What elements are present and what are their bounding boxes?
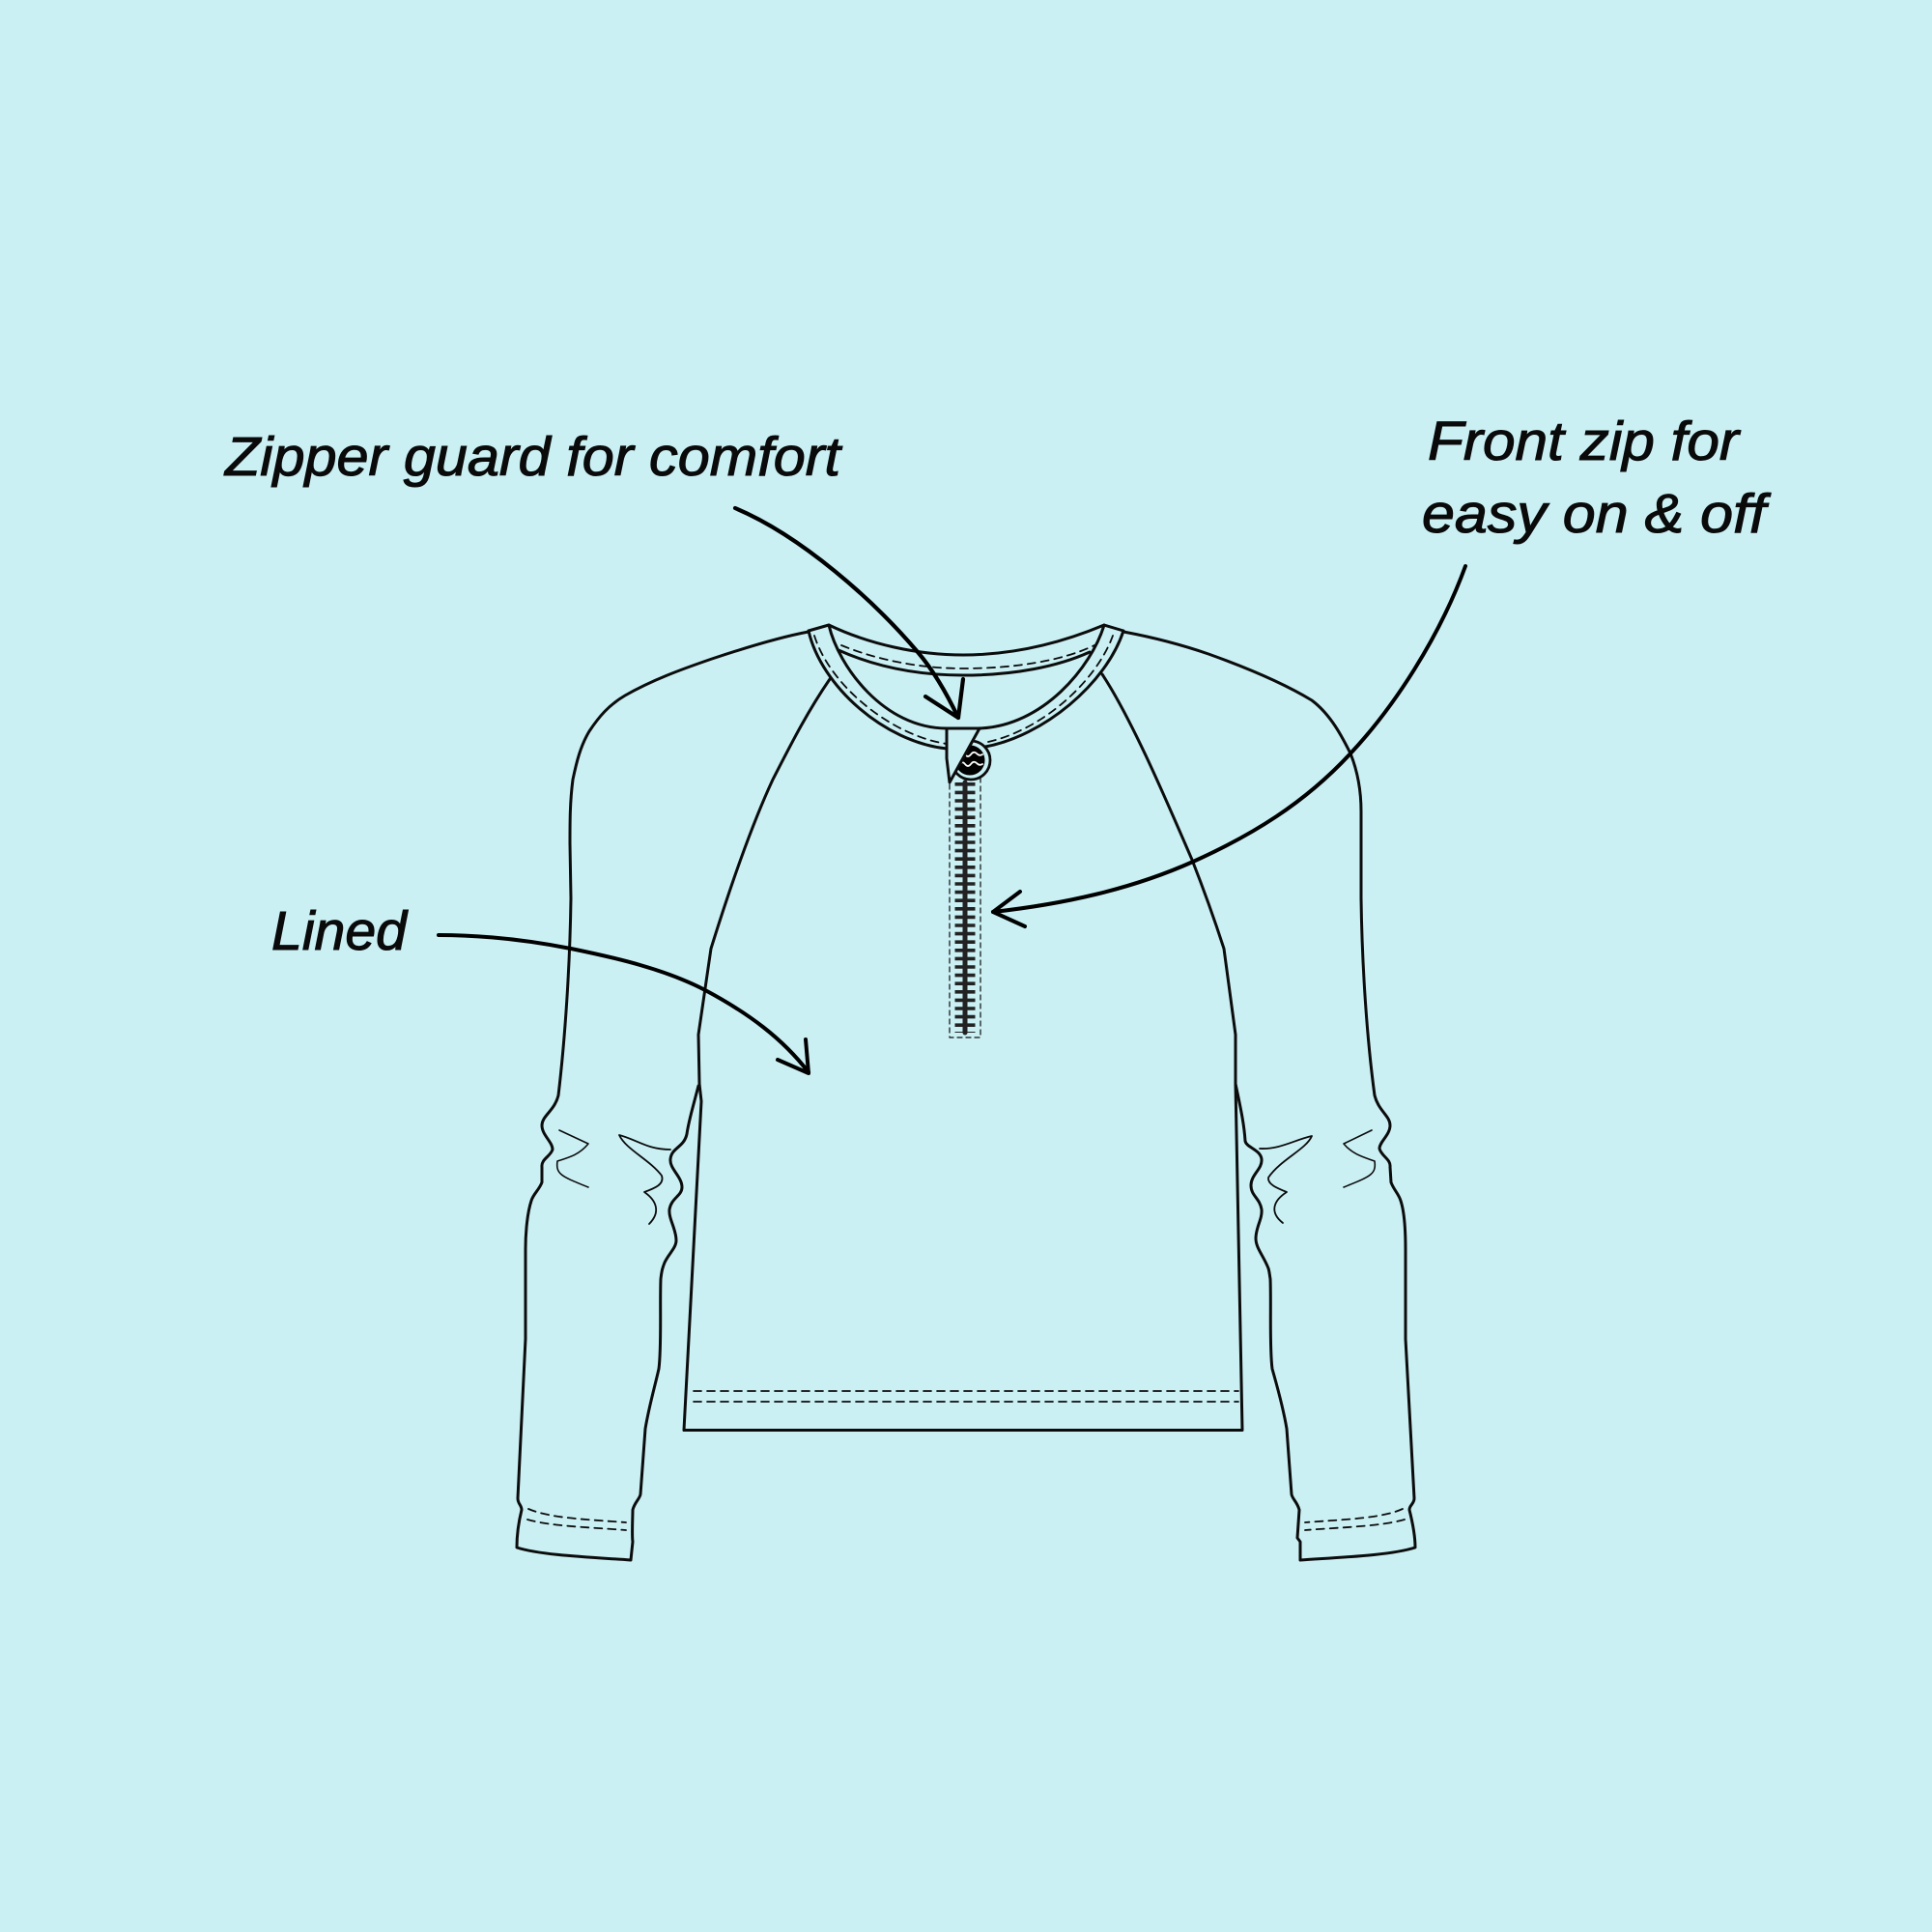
right sleeve [1123,632,1415,1560]
garment: zip-front long sleeve top [517,625,1415,1560]
label: Lined: Lined [271,900,409,962]
icon: zipper pull with wave logo [952,741,990,780]
left sleeve [517,632,809,1560]
label: easy on & off: easy on & off [1422,483,1772,545]
neck collar [809,625,1123,749]
body panel [684,674,1242,1430]
zipper with stitching [950,778,980,1037]
label: Zipper guard for comfort: Zipper guard for comfort [223,426,842,488]
arrow: to front zip [993,566,1465,926]
arrow: to lining [439,935,809,1073]
arrow: to zipper guard [735,508,963,718]
zipper guard flap [947,728,980,782]
label: Front zip for: Front zip for [1428,411,1741,472]
